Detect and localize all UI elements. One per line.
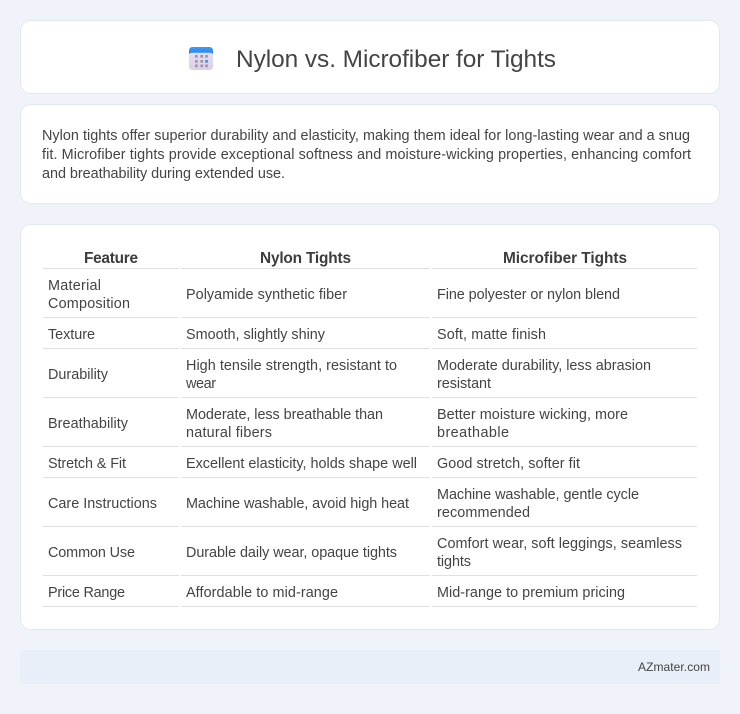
intro paragraph: and breathability during extended use.	[42, 166, 285, 182]
row: price range	[48, 585, 625, 601]
row: breathability	[48, 407, 628, 441]
row: stretch and fit	[48, 456, 580, 472]
row: material composition: Polyamide synthetic fiber	[186, 287, 347, 303]
row: breathability: Breathability	[48, 416, 129, 432]
row: price range: Mid-range to premium pricing	[437, 585, 625, 601]
row: texture: Soft, matte finish	[437, 327, 546, 343]
row: durability: Moderate durability, less abrasion	[437, 358, 651, 374]
row dividers	[43, 268, 697, 606]
intro paragraph	[42, 128, 691, 182]
row: durability	[48, 358, 651, 392]
row: breathability: natural fibers	[186, 425, 272, 441]
row: price range: Price Range	[48, 585, 125, 601]
row: stretch and fit: Good stretch, softer fit	[437, 456, 580, 472]
row: texture: Texture	[48, 327, 95, 343]
row: durability: Durability	[48, 367, 109, 383]
row: texture	[48, 327, 546, 343]
row: durability: wear	[185, 376, 216, 392]
row: stretch and fit: Excellent elasticity, holds shape well	[186, 456, 417, 472]
panel: comparison table	[20, 224, 720, 630]
row: stretch and fit: Stretch & Fit	[48, 456, 126, 472]
table header: Nylon Tights	[260, 250, 351, 267]
row: durability: High tensile strength, resistant to	[186, 358, 397, 374]
intro paragraph: Nylon tights offer superior durability and elasticity, making them ideal for long-lasting wear and a snug	[42, 128, 690, 144]
table header: Microfiber Tights	[503, 250, 627, 267]
row: breathability: Moderate, less breathable than	[186, 407, 383, 423]
row: price range: Affordable to mid-range	[186, 585, 338, 601]
row: care instructions: Machine washable, gentle cycle	[437, 487, 639, 503]
row: material composition: Material	[48, 278, 101, 294]
footer	[20, 650, 720, 684]
row: common use	[48, 536, 682, 570]
row: common use: tights	[437, 554, 471, 570]
row: durability: resistant	[437, 376, 491, 392]
row: care instructions	[48, 487, 639, 521]
intro paragraph: fit. Microfiber tights provide exceptional softness and moisture-wicking properties, enhancing comfort	[42, 147, 691, 163]
row: texture: Smooth, slightly shiny	[186, 327, 326, 343]
row: common use: Comfort wear, soft leggings, seamless	[437, 536, 682, 552]
row: material composition: Fine polyester or nylon blend	[437, 287, 620, 303]
row: common use: Durable daily wear, opaque tights	[186, 545, 397, 561]
title text: Nylon vs. Microfiber for Tights	[236, 46, 556, 73]
row: breathability: Better moisture wicking, more	[437, 407, 628, 423]
row: material composition: Composition	[48, 296, 130, 312]
panel: title	[20, 20, 720, 94]
panel: introduction	[20, 104, 720, 204]
row: care instructions: Machine washable, avoid high heat	[186, 496, 409, 512]
row: material composition	[48, 278, 620, 312]
row: breathability: breathable	[437, 425, 509, 441]
footer credit: AZmater.com	[638, 660, 710, 674]
table header: Feature	[84, 250, 138, 267]
icon: calendar	[189, 47, 213, 70]
row: common use: Common Use	[48, 545, 135, 561]
row: care instructions: recommended	[437, 505, 530, 521]
row: care instructions: Care Instructions	[48, 496, 157, 512]
table header	[84, 250, 627, 267]
